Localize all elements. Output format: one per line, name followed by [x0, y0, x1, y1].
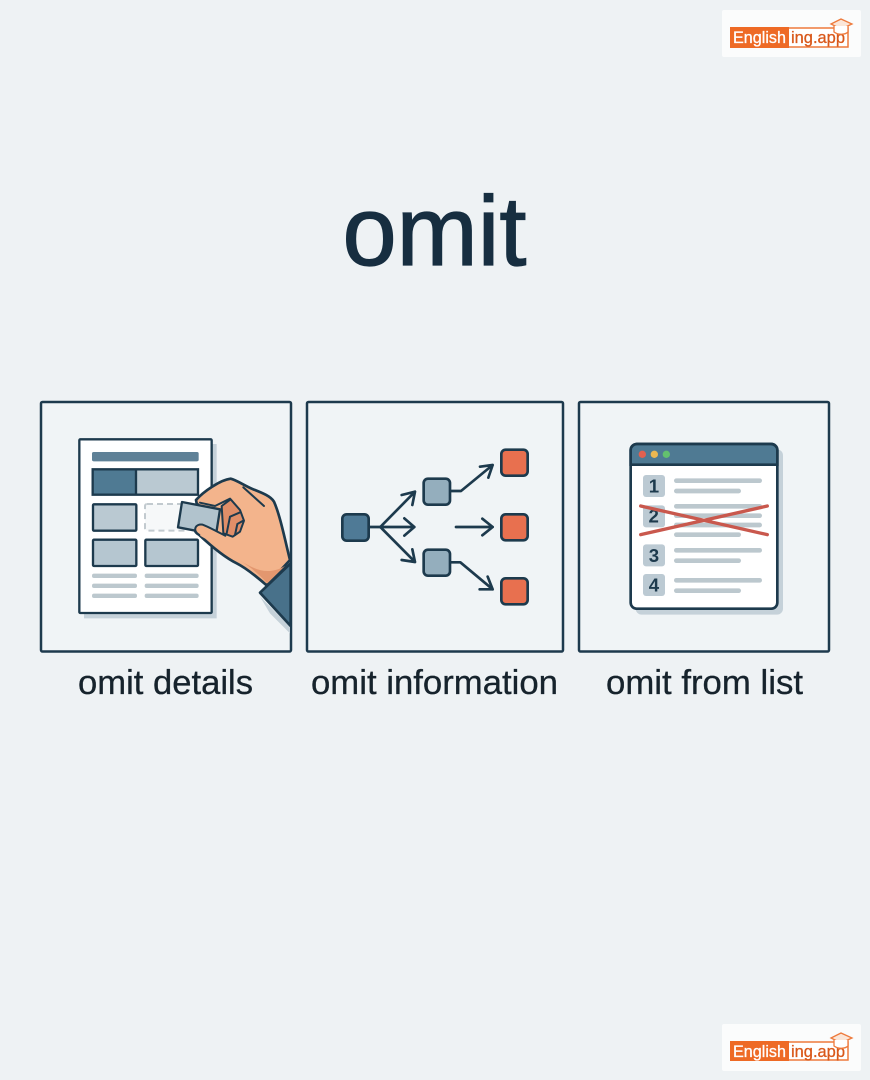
sleeve shadow [260, 597, 290, 633]
document header bar [92, 452, 199, 461]
table row one [93, 469, 198, 495]
logo: bottom right [722, 1024, 861, 1071]
thumb [195, 525, 232, 543]
window title bar [631, 444, 777, 465]
label: omit details: omit details [78, 664, 253, 702]
panel: omit from list [579, 402, 829, 652]
erased dashed cell [145, 504, 188, 531]
text lines [92, 574, 199, 598]
list item 4 [643, 574, 762, 596]
window buttons [639, 451, 670, 458]
hand [195, 479, 290, 585]
list item 1 [643, 475, 762, 497]
list item 2: crossed out [641, 504, 767, 537]
red cross [641, 506, 767, 535]
table cell [93, 504, 136, 531]
panel: omit details [41, 402, 291, 652]
middle node [424, 479, 450, 505]
table cell [145, 540, 198, 566]
output node [501, 514, 528, 540]
hand shading [240, 561, 285, 583]
list item 1: 1 [649, 476, 659, 497]
table cell [93, 540, 136, 566]
panel: omit information [307, 402, 563, 652]
output node [501, 578, 528, 604]
logo: bottom right: English [733, 1042, 786, 1061]
list window illustration [631, 444, 783, 615]
middle node [424, 550, 450, 576]
source node [342, 514, 369, 541]
logo: top right: ing.app [791, 28, 845, 47]
sleeve [260, 563, 291, 626]
logo: top right [722, 10, 861, 57]
list item 3 [643, 544, 762, 566]
output node [501, 450, 528, 476]
document page [79, 439, 212, 613]
list item 2: crossed out: 2 [648, 506, 659, 527]
title: omit [342, 176, 526, 286]
logo: bottom right: ing.app [791, 1042, 845, 1061]
eraser [178, 502, 220, 535]
window shadow [636, 449, 783, 615]
label: omit from list: omit from list [606, 664, 804, 702]
flow diagram [342, 450, 528, 604]
document shadow [84, 444, 217, 618]
logo: top right: English [733, 28, 786, 47]
window body [631, 444, 777, 609]
label: omit information: omit information [311, 664, 558, 702]
list item 4: 4 [649, 575, 660, 596]
curled fingers [222, 499, 244, 537]
illustration: document with eraser hand [79, 439, 291, 633]
list item 3: 3 [649, 545, 659, 566]
arrows [369, 465, 493, 589]
